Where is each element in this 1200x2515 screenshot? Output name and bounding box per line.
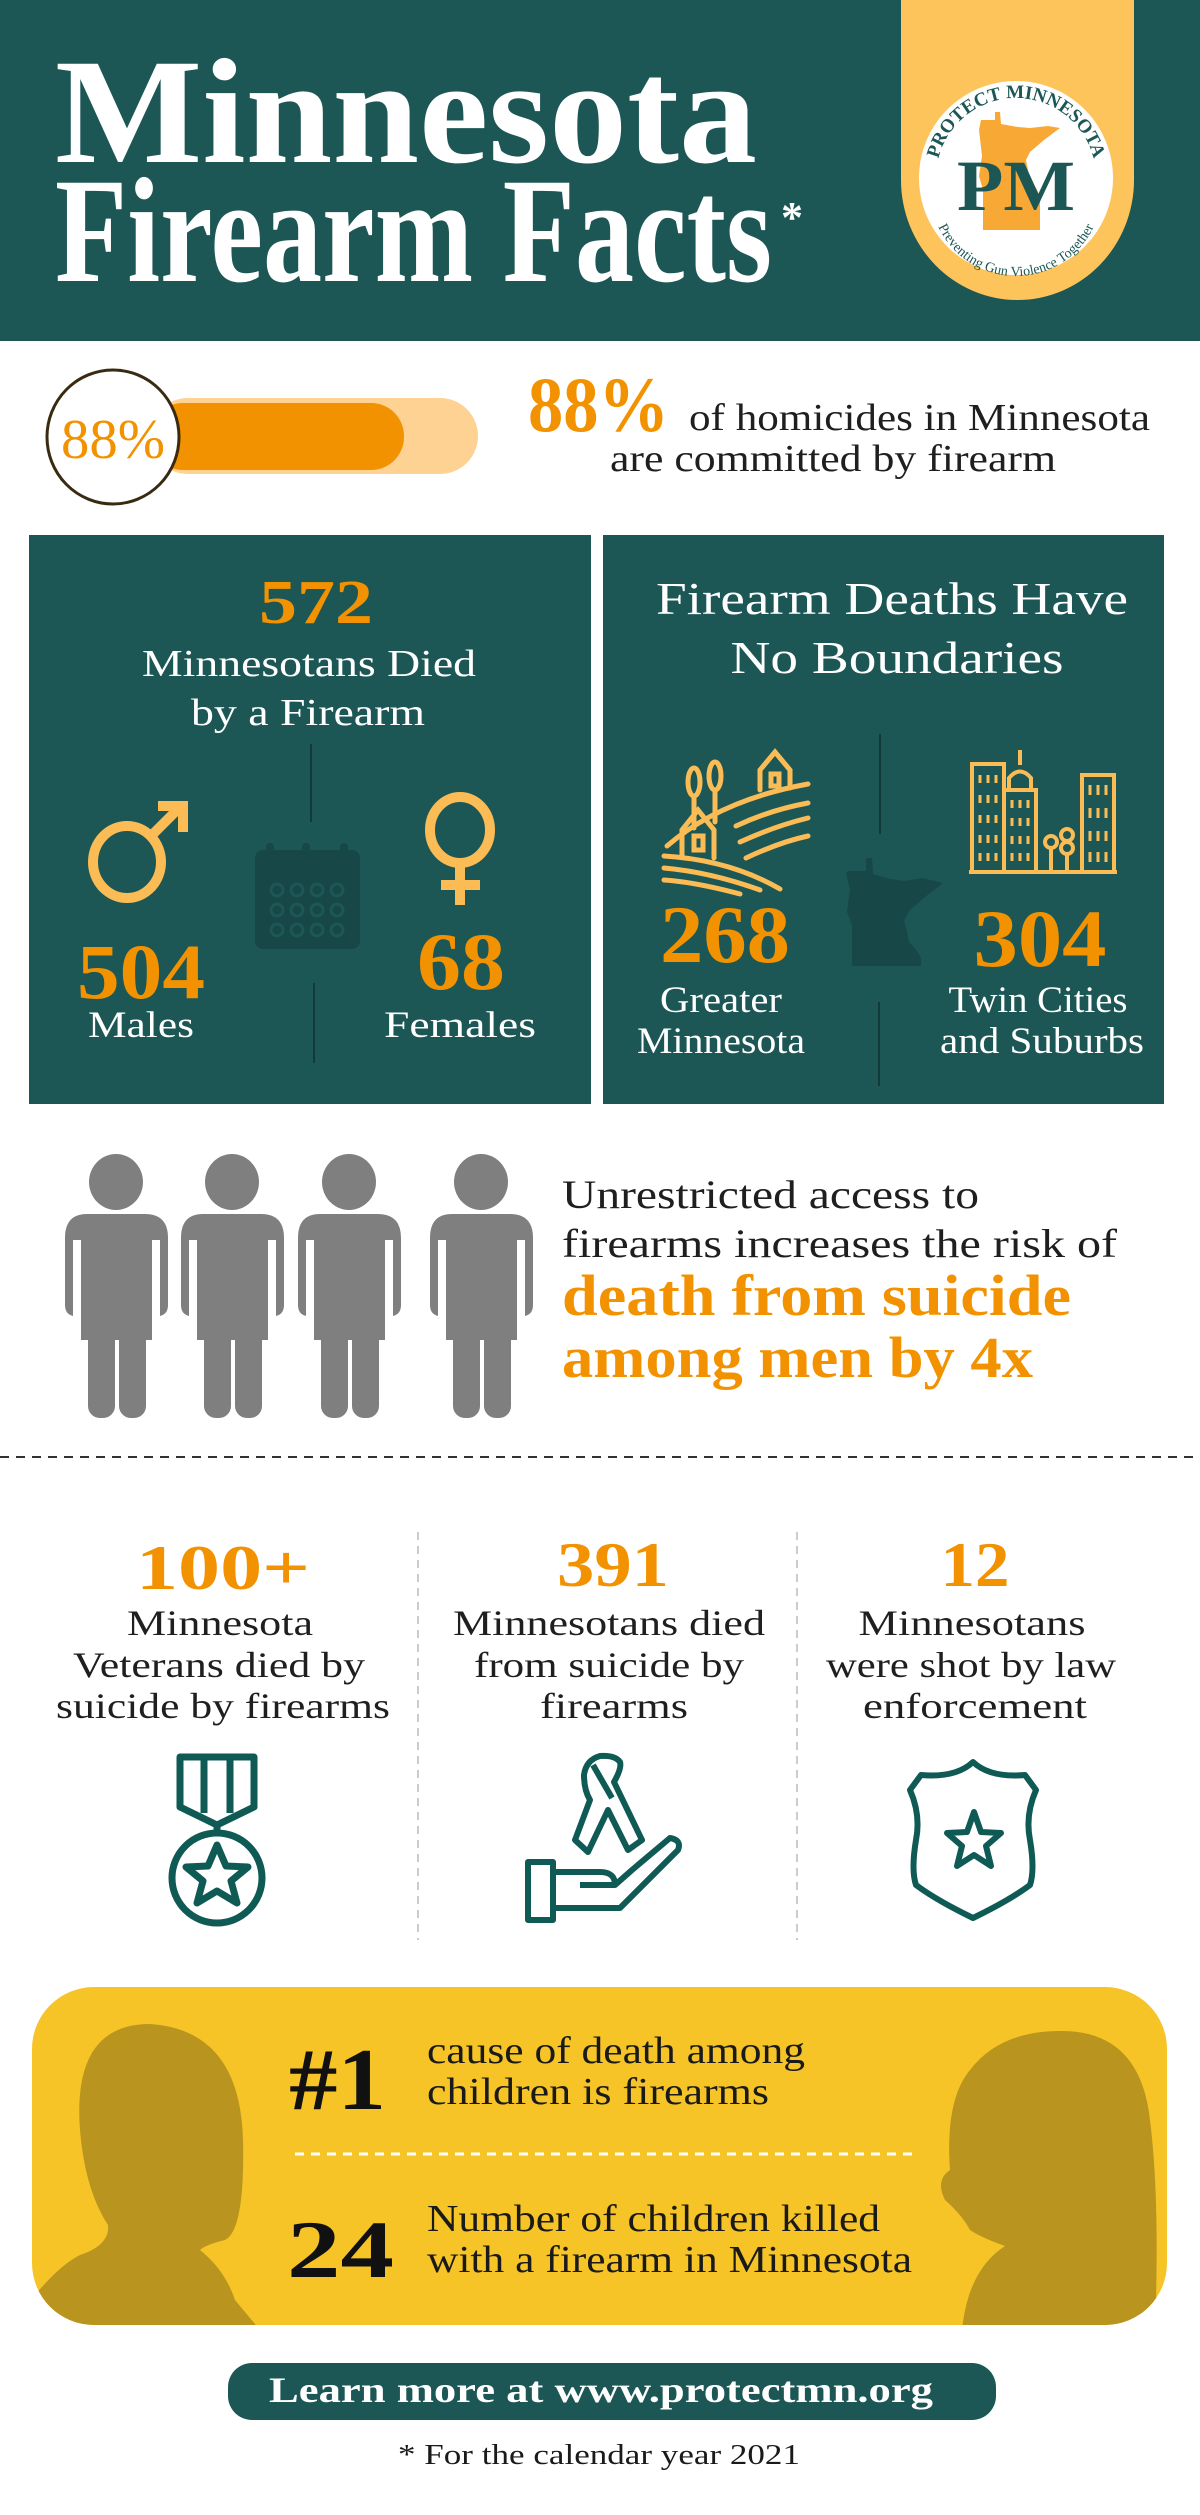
stat: males: 504: [77, 928, 205, 1015]
stat: twin cities: [940, 893, 1144, 1062]
stat: greater minnesota: [637, 889, 805, 1062]
text: suicide risk: among men by 4x: [562, 1325, 1033, 1390]
icon: calendar: [255, 843, 360, 949]
panel: no boundaries: Firearm Deaths Have: [656, 573, 1128, 624]
stat: females: 68: [417, 916, 505, 1007]
icon: minnesota state: [846, 858, 943, 966]
stat: males: Males: [88, 1005, 194, 1046]
icon: farm: [664, 752, 808, 894]
panel: 572 died: 572: [259, 569, 373, 637]
stat: greater minnesota: 268: [660, 889, 790, 980]
logo tab: Preventing Gun Violence Together: [938, 222, 1094, 276]
column: law enforcement: enforcement: [863, 1686, 1087, 1726]
column: law enforcement: Minnesotans: [858, 1603, 1086, 1643]
logo tab: PM: [957, 146, 1075, 226]
panel: children callout: [20, 1987, 1167, 2330]
stat: twin cities: Twin Cities: [948, 980, 1128, 1021]
homicide stat text: 88%: [528, 361, 669, 448]
column: suicide by firearms: 391: [557, 1529, 669, 1600]
button: learn more: [228, 2363, 996, 2420]
logo tab: PROTECT MINNESOTA: [926, 86, 1104, 159]
stat: #1 cause: [289, 2030, 805, 2129]
panel: no boundaries: No Boundaries: [730, 632, 1064, 683]
panel: no boundaries: [603, 535, 1164, 1104]
column: suicide by firearms: from suicide by: [474, 1645, 744, 1685]
column: veterans: suicide by firearms: [56, 1686, 390, 1726]
column: suicide by firearms: firearms: [540, 1686, 688, 1726]
header banner: [0, 0, 1200, 341]
stat: greater minnesota: Minnesota: [637, 1021, 805, 1062]
silhouettes: [20, 2024, 1157, 2330]
column: suicide by firearms: [453, 1529, 765, 1920]
logo state shape: [979, 112, 1060, 230]
icon: police shield: [910, 1762, 1036, 1918]
button: learn more: Learn more at www.protectmn.org: [269, 2370, 933, 2410]
stat: females: Females: [384, 1005, 536, 1046]
column: suicide by firearms: Minnesotans died: [453, 1603, 765, 1643]
text: suicide risk: Unrestricted access to: [562, 1172, 979, 1217]
stat: 24 children: [287, 2198, 912, 2295]
homicide stat text: [528, 361, 1150, 480]
panel: 572 died: Minnesotans Died: [142, 643, 476, 685]
text: suicide risk: death from suicide: [562, 1263, 1071, 1328]
icon: ribbon in hand: [528, 1756, 679, 1920]
stat: #1 cause: #1: [289, 2032, 386, 2129]
title: Firearm Facts: [55, 148, 772, 314]
icon: four men figures: [65, 1154, 533, 1418]
progress bar 88%: [47, 370, 478, 504]
logo tab: [901, 0, 1134, 300]
text: suicide risk: [562, 1172, 1118, 1390]
icon: city: [969, 750, 1117, 872]
icon: female symbol: [430, 797, 490, 905]
stat: 24 children: Number of children killed: [427, 2198, 880, 2240]
stat: twin cities: and Suburbs: [940, 1021, 1144, 1062]
column: veterans: [56, 1532, 390, 1923]
stat: #1 cause: cause of death among: [427, 2030, 805, 2072]
column: law enforcement: 12: [940, 1529, 1010, 1600]
progress bar 88%: 88%: [61, 409, 165, 471]
icon: medal: [172, 1757, 262, 1923]
stat: 24 children: with a firearm in Minnesota: [427, 2239, 912, 2281]
homicide stat text: are committed by firearm: [610, 438, 1056, 480]
column: law enforcement: were shot by law: [826, 1645, 1116, 1685]
column: veterans: Minnesota: [127, 1603, 313, 1643]
stat: greater minnesota: Greater: [660, 980, 782, 1021]
icon: male symbol: [93, 806, 183, 898]
stat: 24 children: 24: [287, 2204, 394, 2295]
stat: females: [384, 916, 536, 1046]
stat: twin cities: 304: [974, 893, 1106, 984]
column: veterans: 100+: [136, 1532, 310, 1603]
text: suicide risk: firearms increases the risk of: [562, 1221, 1118, 1266]
homicide stat text: of homicides in Minnesota: [689, 397, 1150, 439]
column: veterans: Veterans died by: [73, 1645, 365, 1685]
title: *: [781, 193, 803, 242]
stat: #1 cause: children is firearms: [427, 2071, 769, 2113]
column: law enforcement: [826, 1529, 1116, 1918]
panel: 572 died: by a Firearm: [191, 692, 425, 734]
title: [55, 29, 803, 314]
title: Minnesota: [55, 29, 757, 195]
footnote: * For the calendar year 2021: [398, 2439, 800, 2471]
stat: males: [77, 928, 205, 1046]
panel: 572 died: [29, 535, 591, 1104]
